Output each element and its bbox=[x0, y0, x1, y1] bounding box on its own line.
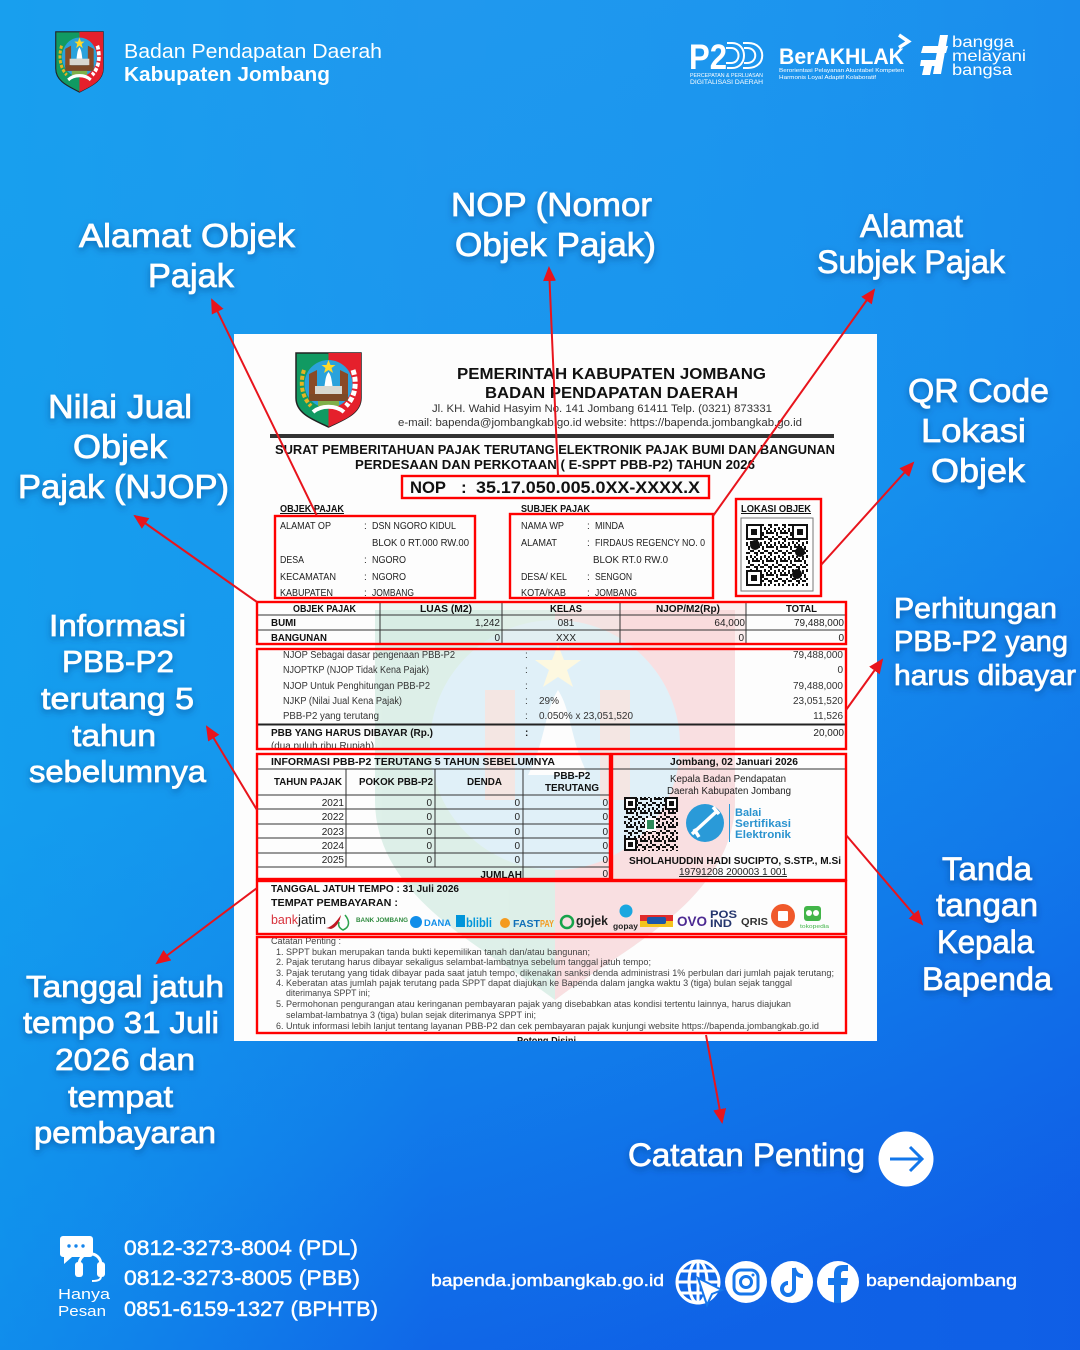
panel: subjek pajak: SENGON bbox=[595, 572, 632, 583]
logo: BerAKHLAK: Berorientasi Pelayanan Akuntabel Kompeten bbox=[779, 68, 904, 74]
label: perhitungan PBB-P2: Perhitungan bbox=[894, 593, 1057, 625]
label: tanda tangan kepala bapenda: Tanda bbox=[942, 851, 1032, 887]
label: QR code lokasi objek: QR Code bbox=[908, 372, 1049, 409]
table: informasi 5 tahun sebelumnya: DENDA bbox=[467, 777, 502, 788]
panel: perhitungan PBB-P2: NJKP (Nilai Jual Kena Pajak) bbox=[283, 696, 402, 707]
panel: catatan penting: 4. bbox=[276, 978, 284, 988]
panel: perhitungan PBB-P2: : bbox=[525, 696, 528, 707]
payment logos: gopay bbox=[613, 922, 639, 931]
icon: facebook bbox=[817, 1261, 859, 1303]
arrow: NOP bbox=[549, 268, 558, 476]
table: informasi 5 tahun sebelumnya: POKOK PBB-P2 bbox=[359, 777, 433, 788]
label: informasi PBB-P2 bbox=[29, 608, 207, 789]
panel: catatan penting: Permohonan pengurangan atau keringanan pembayaran pajak yang disebabkan atas kondisi tertentu lainnya, harus diajukan bbox=[286, 999, 791, 1009]
payment logos: bank bbox=[271, 912, 298, 927]
table: informasi 5 tahun sebelumnya: 0 bbox=[426, 798, 432, 809]
table: informasi 5 tahun sebelumnya: TERUTANG bbox=[545, 783, 599, 794]
table: objek pajak: 0 bbox=[494, 633, 500, 644]
text: phone numbers bbox=[124, 1237, 378, 1321]
arrow: QR code bbox=[821, 463, 913, 565]
payment logos: BANK JOMBANG bbox=[356, 917, 408, 924]
label: QR code lokasi objek: Objek bbox=[931, 452, 1026, 489]
icon: Balai Sertifikasi Elektronik: Sertifikasi bbox=[735, 818, 791, 830]
table: informasi 5 tahun sebelumnya: 0 bbox=[426, 855, 432, 866]
label: NOP: Objek Pajak) bbox=[455, 226, 656, 263]
panel: perhitungan PBB-P2: NJOP Sebagai dasar pengenaan PBB-P2 bbox=[283, 650, 455, 661]
icon: Jombang crest bbox=[56, 32, 103, 92]
payment logos: jatim bbox=[297, 912, 326, 927]
table: objek pajak: TOTAL bbox=[786, 604, 817, 615]
arrow: perhitungan bbox=[846, 660, 882, 710]
panel: catatan penting: 6. bbox=[276, 1021, 284, 1031]
label: perhitungan PBB-P2 bbox=[894, 593, 1076, 692]
table: objek pajak: 64,000 bbox=[714, 618, 745, 629]
table: informasi 5 tahun sebelumnya: 2024 bbox=[322, 841, 344, 852]
table: informasi 5 tahun sebelumnya: 2025 bbox=[322, 855, 344, 866]
table: informasi 5 tahun sebelumnya: 2021 bbox=[322, 798, 344, 809]
panel: perhitungan PBB-P2: 20,000 bbox=[813, 728, 844, 739]
label: NJOP: Nilai Jual bbox=[48, 388, 192, 425]
logo: bangga melayani bangsa bbox=[920, 34, 1026, 79]
panel: objek pajak: ALAMAT OP bbox=[280, 521, 331, 532]
payment logos: QRIS bbox=[741, 916, 768, 928]
document title: PERDESAAN DAN PERKOTAAN ( E-SPPT PBB-P2) TAHUN 2026 bbox=[355, 457, 755, 472]
document letterhead: PEMERINTAH KABUPATEN JOMBANG bbox=[457, 366, 766, 383]
table: objek pajak bbox=[257, 602, 846, 644]
panel: subjek pajak: NAMA WP bbox=[521, 521, 564, 532]
table: informasi 5 tahun sebelumnya: 0 bbox=[514, 855, 520, 866]
panel: subjek pajak: MINDA bbox=[595, 521, 624, 532]
panel: tanda tangan kepala bapenda bbox=[612, 754, 846, 880]
label: NJOP bbox=[18, 388, 229, 505]
panel: perhitungan PBB-P2: PBB YANG HARUS DIBAYAR (Rp.) bbox=[271, 728, 433, 739]
panel: subjek pajak: : bbox=[587, 588, 590, 599]
table: objek pajak: 081 bbox=[558, 618, 575, 629]
table: informasi 5 tahun sebelumnya: 0 bbox=[602, 827, 608, 838]
table: informasi 5 tahun sebelumnya: 0 bbox=[602, 869, 608, 880]
panel: perhitungan PBB-P2: : bbox=[525, 650, 528, 661]
annotation arrows bbox=[135, 268, 922, 1122]
footer: contact bbox=[58, 1236, 378, 1321]
table: informasi 5 tahun sebelumnya: TAHUN PAJAK bbox=[274, 777, 343, 788]
panel: perhitungan PBB-P2: 11,526 bbox=[813, 711, 843, 722]
label: QR code lokasi objek: Lokasi bbox=[921, 412, 1026, 449]
panel: tanggal jatuh tempo dan tempat pembayaran: TEMPAT PEMBAYARAN : bbox=[271, 898, 398, 909]
document title bbox=[275, 445, 834, 472]
text: social handle: bapendajombang bbox=[866, 1271, 1017, 1290]
panel: catatan penting: selambat-lambatnya 3 (tiga) bulan sejak diterimanya SPPT ini; bbox=[286, 1010, 536, 1020]
text: hanya pesan: Pesan bbox=[58, 1303, 106, 1320]
label: alamat objek pajak: Pajak bbox=[148, 257, 235, 294]
panel: tanda tangan kepala bapenda: SHOLAHUDDIN HADI SUCIPTO, S.STP., M.Si bbox=[629, 856, 841, 867]
icon: QR code bbox=[746, 524, 808, 586]
logo: BerAKHLAK: BerAKHLAK bbox=[779, 44, 904, 69]
icon: Balai Sertifikasi Elektronik bbox=[686, 804, 792, 842]
panel: objek pajak: DSN NGORO KIDUL bbox=[372, 521, 456, 532]
label: tanggal jatuh tempo: tempat bbox=[68, 1079, 173, 1114]
panel: perhitungan PBB-P2: NJOP Untuk Penghitungan PBB-P2 bbox=[283, 681, 430, 692]
NOP number: : bbox=[461, 478, 467, 497]
document letterhead: BADAN PENDAPATAN DAERAH bbox=[485, 385, 738, 402]
label: informasi PBB-P2: PBB-P2 bbox=[62, 644, 174, 679]
panel: perhitungan PBB-P2: 0 bbox=[837, 665, 843, 676]
panel: objek pajak bbox=[275, 504, 475, 599]
table: informasi 5 tahun sebelumnya: 0 bbox=[426, 812, 432, 823]
label: NOP: NOP (Nomor bbox=[451, 186, 652, 223]
payment logos: POS bbox=[710, 909, 737, 921]
logo: BerAKHLAK bbox=[779, 35, 908, 81]
document: E-SPPT sheet bbox=[234, 334, 877, 1047]
panel: subjek pajak: : bbox=[587, 521, 590, 532]
arrow: alamat subjek bbox=[713, 290, 874, 516]
panel: objek pajak: : bbox=[364, 588, 367, 599]
agency name: Badan Pendapatan Daerah bbox=[124, 41, 382, 63]
label: catatan penting: Catatan Penting bbox=[628, 1137, 865, 1173]
text: hanya pesan: Hanya bbox=[58, 1286, 111, 1303]
panel: objek pajak: OBJEK PAJAK bbox=[280, 504, 345, 515]
icon: instagram bbox=[725, 1261, 767, 1303]
annotation labels bbox=[18, 186, 1076, 1173]
panel: catatan penting: Untuk informasi lebih lanjut tentang layanan PBB-P2 dan cek pembayaran pajak kunjungi website https://bapenda.jombangkab.go.id bbox=[286, 1021, 819, 1031]
table: informasi 5 tahun sebelumnya: 0 bbox=[514, 841, 520, 852]
header: partner logos bbox=[689, 34, 1026, 86]
icon: globe bbox=[677, 1261, 722, 1305]
panel: tanggal jatuh tempo dan tempat pembayaran: TANGGAL JATUH TEMPO : 31 Juli 2026 bbox=[271, 884, 459, 895]
panel: perhitungan PBB-P2: NJOPTKP (NJOP Tidak Kena Pajak) bbox=[283, 665, 429, 676]
table: objek pajak: 79,488,000 bbox=[794, 618, 844, 629]
table: informasi 5 tahun sebelumnya: 0 bbox=[426, 827, 432, 838]
panel: objek pajak: KABUPATEN bbox=[280, 588, 333, 599]
panel: objek pajak: BLOK 0 RT.000 RW.00 bbox=[372, 538, 469, 549]
panel: objek pajak: KECAMATAN bbox=[280, 572, 336, 583]
watermark crest bbox=[375, 610, 735, 1000]
panel: catatan penting: 1. bbox=[276, 947, 284, 957]
NOP number: NOP bbox=[410, 478, 446, 497]
label: tanggal jatuh tempo: pembayaran bbox=[34, 1115, 216, 1150]
label: alamat objek pajak bbox=[79, 217, 296, 294]
panel: subjek pajak: : bbox=[587, 572, 590, 583]
label: alamat subjek pajak: Alamat bbox=[860, 208, 963, 244]
table: objek pajak: BUMI bbox=[271, 618, 296, 629]
table: informasi 5 tahun sebelumnya: 0 bbox=[602, 841, 608, 852]
label: QR code lokasi objek bbox=[908, 372, 1049, 489]
label: alamat subjek pajak bbox=[817, 208, 1006, 280]
panel: catatan penting: 5. bbox=[276, 999, 284, 1009]
panel: objek pajak: DESA bbox=[280, 555, 304, 566]
icon: Balai Sertifikasi Elektronik: Balai bbox=[735, 807, 761, 819]
table: informasi 5 tahun sebelumnya: 0 bbox=[602, 812, 608, 823]
panel: catatan penting: 2. bbox=[276, 957, 284, 967]
panel: lokasi objek QR bbox=[736, 499, 821, 596]
table: informasi 5 tahun sebelumnya: JUMLAH bbox=[480, 870, 522, 881]
panel: perhitungan PBB-P2: : bbox=[525, 711, 528, 722]
table: objek pajak: BANGUNAN bbox=[271, 633, 327, 644]
label: tanggal jatuh tempo: tempo 31 Juli bbox=[23, 1005, 219, 1040]
panel: catatan penting: Catatan Penting : bbox=[271, 936, 341, 946]
payment logos: FAST bbox=[513, 918, 541, 930]
agency name bbox=[124, 41, 382, 86]
panel: catatan penting: diterimanya SPPT ini; bbox=[286, 988, 370, 998]
arrow: NJOP bbox=[135, 516, 257, 602]
panel: objek pajak: JOMBANG bbox=[372, 588, 414, 599]
logo: P2DD bbox=[689, 38, 763, 86]
table: informasi 5 tahun sebelumnya: INFORMASI PBB-P2 TERUTANG 5 TAHUN SEBELUMNYA bbox=[271, 756, 555, 768]
table: informasi 5 tahun sebelumnya bbox=[257, 754, 610, 881]
icon: arrow button bbox=[878, 1132, 934, 1186]
panel: perhitungan PBB-P2: : bbox=[525, 728, 528, 739]
table: informasi 5 tahun sebelumnya: PBB-P2 bbox=[554, 771, 591, 782]
label: NJOP: Pajak (NJOP) bbox=[18, 468, 229, 505]
panel: tanggal jatuh tempo dan tempat pembayaran bbox=[257, 881, 846, 934]
label: informasi PBB-P2: sebelumnya bbox=[29, 754, 207, 789]
label: alamat subjek pajak: Subjek Pajak bbox=[817, 244, 1006, 280]
payment logos: gojek bbox=[576, 913, 609, 928]
text: hanya pesan bbox=[58, 1286, 111, 1320]
label: perhitungan PBB-P2: harus dibayar bbox=[894, 660, 1076, 692]
table: objek pajak: XXX bbox=[556, 633, 576, 644]
table: objek pajak: 0 bbox=[838, 633, 844, 644]
panel: objek pajak: NGORO bbox=[372, 555, 406, 566]
table: informasi 5 tahun sebelumnya: 0 bbox=[602, 798, 608, 809]
table: objek pajak: NJOP/M2(Rp) bbox=[656, 604, 720, 615]
payment logos bbox=[271, 904, 830, 931]
panel: catatan penting bbox=[257, 936, 846, 1033]
label: tanda tangan kepala bapenda bbox=[922, 851, 1052, 997]
text: phone numbers: 0812-3273-8005 (PBB) bbox=[124, 1267, 360, 1290]
panel: catatan penting: SPPT bukan merupakan tanda bukti kepemilikan tanah dan/atau bangunan; bbox=[286, 947, 590, 957]
document title: SURAT PEMBERITAHUAN PAJAK TERUTANG ELEKTRONIK PAJAK BUMI DAN BANGUNAN bbox=[275, 442, 835, 457]
logo: P2DD: DIGITALISASI DAERAH bbox=[690, 79, 763, 86]
table: informasi 5 tahun sebelumnya: 2023 bbox=[322, 827, 344, 838]
icon: signature QR code bbox=[624, 797, 678, 851]
payment logos: OVO bbox=[677, 913, 707, 929]
logo: P2DD: PERCEPATAN & PERLUASAN bbox=[690, 73, 763, 79]
panel: objek pajak: NGORO bbox=[372, 572, 406, 583]
panel: subjek pajak: DESA/ KEL bbox=[521, 572, 567, 583]
arrow: tanggal jatuh tempo bbox=[157, 888, 257, 963]
logo: bangga melayani bangsa: bangsa bbox=[952, 62, 1012, 79]
panel: subjek pajak: FIRDAUS REGENCY NO. 0 bbox=[595, 538, 705, 549]
table: informasi 5 tahun sebelumnya: 0 bbox=[602, 855, 608, 866]
payment logos: tokopedia bbox=[800, 924, 830, 930]
arrow: informasi bbox=[207, 727, 257, 810]
label: informasi PBB-P2: tahun bbox=[72, 718, 156, 753]
panel: subjek pajak: JOMBANG bbox=[595, 588, 637, 599]
label: tanda tangan kepala bapenda: Bapenda bbox=[922, 961, 1052, 997]
table: objek pajak: KELAS bbox=[550, 604, 582, 615]
table: informasi 5 tahun sebelumnya: 0 bbox=[514, 798, 520, 809]
panel: subjek pajak: KOTA/KAB bbox=[521, 588, 566, 599]
table: objek pajak: 0 bbox=[738, 633, 744, 644]
panel: perhitungan PBB-P2 bbox=[257, 649, 846, 752]
panel: subjek pajak: ALAMAT bbox=[521, 538, 557, 549]
panel: perhitungan PBB-P2: : bbox=[525, 681, 528, 692]
icon: letterhead crest bbox=[296, 353, 361, 427]
text: phone numbers: 0812-3273-8004 (PDL) bbox=[124, 1237, 358, 1260]
icon: chat and headset bbox=[60, 1236, 105, 1281]
panel: catatan penting: 3. bbox=[276, 968, 284, 978]
panel: catatan penting: Pajak terutang yang tidak dibayar pada saat jatuh tempo, dikenakan sanksi denda administrasi 1% perbulan dari jumlah pajak terutang; bbox=[286, 968, 834, 978]
panel: perhitungan PBB-P2: 0.050% x 23,051,520 bbox=[539, 711, 633, 722]
cut line text: Potong Disini bbox=[517, 1036, 576, 1047]
panel: subjek pajak: BLOK RT.0 RW.0 bbox=[593, 555, 668, 566]
panel: catatan penting: Pajak terutang harus dibayar sekaligus selambat-lambatnya sebelum tanggal jatuh tempo; bbox=[286, 957, 651, 967]
panel: perhitungan PBB-P2: 23,051,520 bbox=[793, 696, 843, 707]
table: informasi 5 tahun sebelumnya: 2022 bbox=[322, 812, 344, 823]
NOP number bbox=[402, 476, 709, 498]
table: informasi 5 tahun sebelumnya: 0 bbox=[514, 812, 520, 823]
panel: tanda tangan kepala bapenda: Kepala Badan Pendapatan bbox=[670, 774, 786, 785]
arrow: alamat objek bbox=[212, 300, 317, 516]
panel: subjek pajak: SUBJEK PAJAK bbox=[521, 504, 591, 515]
label: tanda tangan kepala bapenda: Kepala bbox=[937, 924, 1034, 960]
label: perhitungan PBB-P2: PBB-P2 yang bbox=[894, 626, 1068, 658]
arrow: catatan penting bbox=[706, 1035, 722, 1122]
table: informasi 5 tahun sebelumnya: 0 bbox=[426, 841, 432, 852]
text: website: bapenda.jombangkab.go.id bbox=[431, 1271, 664, 1290]
label: tanggal jatuh tempo: Tanggal jatuh bbox=[26, 969, 224, 1004]
footer: social media bbox=[431, 1261, 1017, 1305]
label: tanggal jatuh tempo: 2026 dan bbox=[55, 1042, 195, 1077]
logo: BerAKHLAK: Harmonis Loyal Adaptif Kolaboratif bbox=[779, 75, 877, 81]
document letterhead bbox=[270, 353, 834, 438]
panel: subjek pajak bbox=[510, 504, 713, 599]
panel: perhitungan PBB-P2: 79,488,000 bbox=[793, 681, 843, 692]
panel: lokasi objek QR: LOKASI OBJEK bbox=[741, 504, 812, 515]
text: phone numbers: 0851-6159-1327 (BPHTB) bbox=[124, 1298, 378, 1321]
payment logos: IND bbox=[710, 918, 732, 930]
logo: bangga melayani bangsa: melayani bbox=[952, 48, 1026, 65]
panel: objek pajak: : bbox=[364, 521, 367, 532]
label: tanggal jatuh tempo bbox=[23, 969, 224, 1150]
icon: Balai Sertifikasi Elektronik: Elektronik bbox=[735, 829, 792, 841]
icon: tiktok bbox=[771, 1261, 813, 1303]
panel: perhitungan PBB-P2: (dua puluh ribu Rupiah) bbox=[271, 741, 374, 752]
label: informasi PBB-P2: Informasi bbox=[49, 608, 186, 643]
panel: perhitungan PBB-P2: : bbox=[525, 665, 528, 676]
panel: tanda tangan kepala bapenda: 19791208 200003 1 001 bbox=[679, 867, 787, 878]
table: objek pajak: OBJEK PAJAK bbox=[293, 604, 357, 615]
label: alamat objek pajak: Alamat Objek bbox=[79, 217, 296, 254]
document letterhead: e-mail: bapenda@jombangkab.go.id website: https://bapenda.jombangkab.go.id bbox=[398, 417, 802, 429]
panel: tanda tangan kepala bapenda: Daerah Kabupaten Jombang bbox=[667, 786, 791, 797]
panel: objek pajak: : bbox=[364, 555, 367, 566]
label: tanda tangan kepala bapenda: tangan bbox=[936, 887, 1038, 923]
label: informasi PBB-P2: terutang 5 bbox=[41, 681, 194, 716]
arrow: tanda tangan bbox=[846, 835, 922, 924]
payment logos: PAY bbox=[540, 918, 554, 930]
NOP number: 35.17.050.005.0XX-XXXX.X bbox=[476, 478, 701, 497]
agency name: Kabupaten Jombang bbox=[124, 64, 330, 86]
payment logos: DANA bbox=[424, 918, 452, 928]
panel: perhitungan PBB-P2: 79,488,000 bbox=[793, 650, 843, 661]
panel: catatan penting: Keberatan atas jumlah pajak terutang pada SPPT dapat diajukan ke Bapenda dalam jangka waktu 3 (tiga) bulan sejak tanggal bbox=[286, 978, 792, 988]
label: NOP bbox=[451, 186, 656, 263]
table: objek pajak: LUAS (M2) bbox=[420, 604, 472, 615]
logo: bangga melayani bangsa: bangga bbox=[952, 34, 1014, 51]
panel: tanda tangan kepala bapenda: Jombang, 02 Januari 2026 bbox=[670, 757, 798, 768]
panel: perhitungan PBB-P2: PBB-P2 yang terutang bbox=[283, 711, 379, 722]
document letterhead: Jl. KH. Wahid Hasyim No. 141 Jombang 61411 Telp. (0321) 873331 bbox=[432, 403, 772, 415]
panel: objek pajak: : bbox=[364, 572, 367, 583]
logo: P2DD: P2 bbox=[689, 38, 727, 77]
table: objek pajak: 1,242 bbox=[475, 618, 500, 629]
payment logos: blibli bbox=[466, 915, 492, 930]
panel: subjek pajak: : bbox=[587, 538, 590, 549]
panel: perhitungan PBB-P2: 29% bbox=[539, 696, 559, 707]
label: NJOP: Objek bbox=[73, 428, 168, 465]
header: agency logo and name bbox=[56, 32, 382, 92]
table: informasi 5 tahun sebelumnya: 0 bbox=[514, 827, 520, 838]
